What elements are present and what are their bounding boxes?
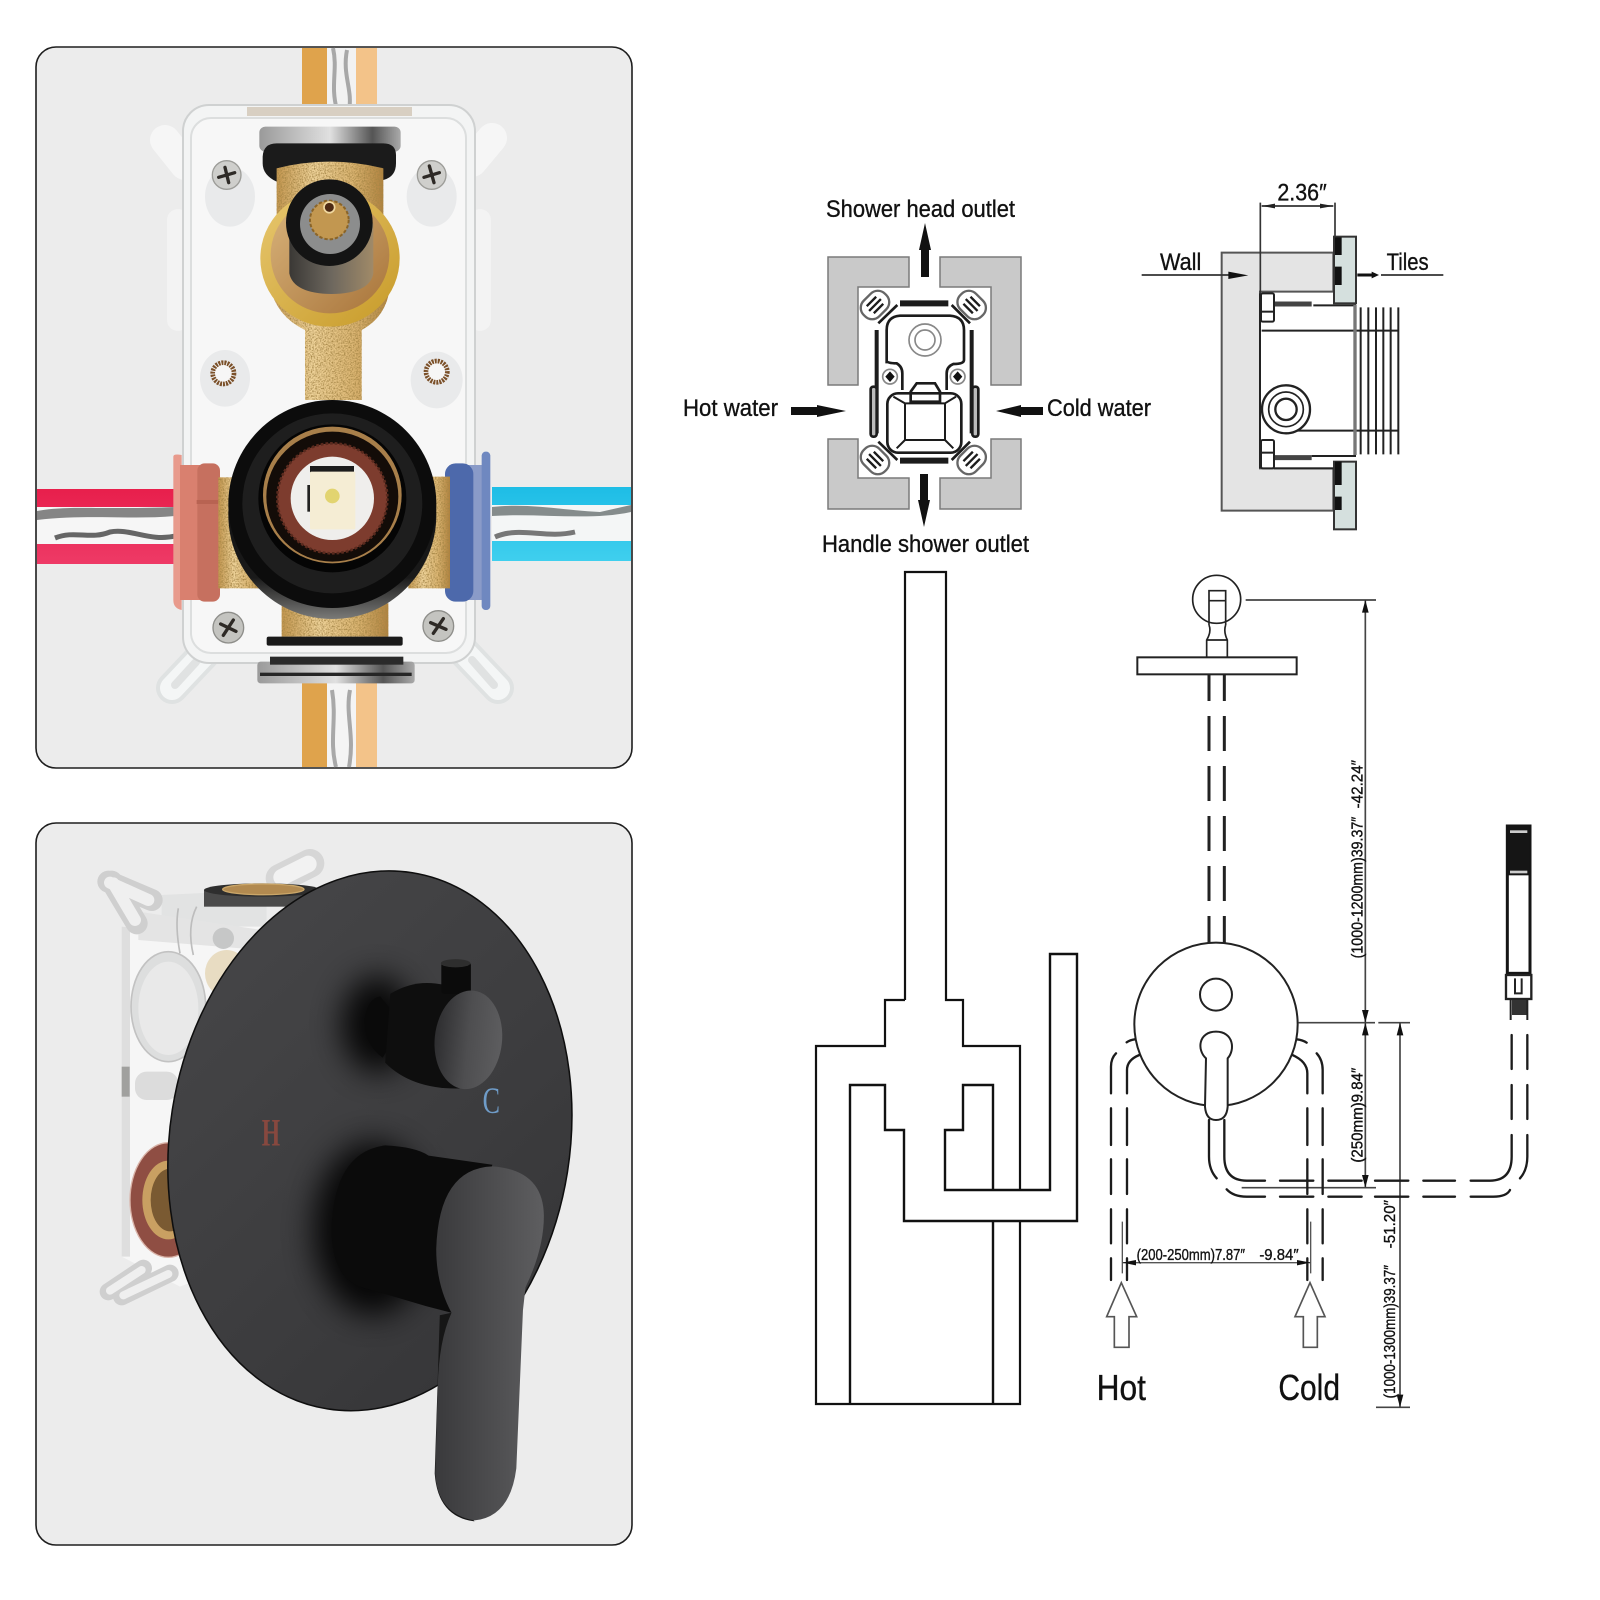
wall pointer: Wall <box>1160 249 1201 276</box>
depth dimension <box>1260 180 1335 293</box>
valve trim front view <box>1134 943 1298 1120</box>
arrow: shower head outlet <box>919 223 931 277</box>
wall pointer <box>1142 249 1248 279</box>
arrow: cold water <box>996 405 1043 417</box>
cold water pipe <box>492 487 631 561</box>
supply width dimension: (200-250mm)7.87″ <box>1137 1247 1245 1264</box>
lever handle <box>332 1145 544 1521</box>
depth dimension: 2.36″ <box>1277 180 1327 207</box>
wall blocks <box>828 257 1021 509</box>
wall section <box>1222 253 1333 511</box>
outlet pipe: bottom <box>302 680 377 767</box>
supply width dimension: -9.84″ <box>1259 1247 1299 1264</box>
letter C: C <box>483 1080 500 1121</box>
valve upper part <box>200 127 463 408</box>
transparent housing <box>183 105 475 663</box>
supply width dimension <box>1122 1222 1311 1273</box>
arrow: handle shower outlet <box>918 474 930 527</box>
hand shower <box>1506 826 1531 1020</box>
label: cold water: Cold water <box>1047 395 1151 422</box>
tiles pointer: Tiles <box>1387 249 1429 276</box>
valve housing outline <box>857 287 990 478</box>
valve lower part <box>173 400 490 683</box>
label: shower head outlet: Shower head outlet <box>826 196 1015 223</box>
label: hot: Hot <box>1097 1367 1146 1408</box>
shower arm and head <box>1137 575 1297 943</box>
arrow: hot inlet <box>1107 1283 1137 1347</box>
arrow: cold inlet <box>1295 1283 1325 1347</box>
dimension: head height: (1000-1200mm)39.37″ <box>1350 816 1367 958</box>
water supply pipework <box>1111 1035 1527 1280</box>
dimension: outlet spacing: (250mm)9.84″ <box>1350 1067 1367 1163</box>
hot water pipe <box>37 489 175 564</box>
outlet pipe: top <box>302 48 377 110</box>
mounting ears <box>165 138 498 688</box>
transparent rough-in box <box>108 863 321 1297</box>
label: hot water: Hot water <box>683 395 778 422</box>
diagram: side section through wall and tiles <box>1142 180 1443 529</box>
label: cold: Cold <box>1278 1367 1340 1408</box>
panel: trim plate and valve product photo <box>36 823 632 1545</box>
diverter knob <box>365 959 507 1093</box>
tiles <box>1334 237 1356 529</box>
dimension: head height max: -42.24″ <box>1350 759 1367 808</box>
label: handle shower outlet: Handle shower outlet <box>822 531 1029 558</box>
panel: concealed valve body with water flow <box>36 47 632 768</box>
diagram: installation heights <box>1097 575 1531 1408</box>
dimension: valve height max: -51.20″ <box>1382 1199 1399 1248</box>
trim plate and controls <box>167 870 573 1522</box>
diagram: valve cross-section outline <box>816 572 1077 1404</box>
diagram: valve plan view with water directions <box>683 196 1151 558</box>
tiles pointer <box>1357 249 1443 278</box>
lower screws <box>213 611 454 643</box>
height dimensions <box>1242 600 1410 1407</box>
dimension: valve height: (1000-1300mm)39.37″ <box>1382 1265 1399 1398</box>
arrow: hot water <box>791 405 846 417</box>
screws and brass inserts <box>212 161 447 384</box>
letter H: H <box>262 1111 280 1154</box>
valve body side view <box>1260 293 1398 468</box>
